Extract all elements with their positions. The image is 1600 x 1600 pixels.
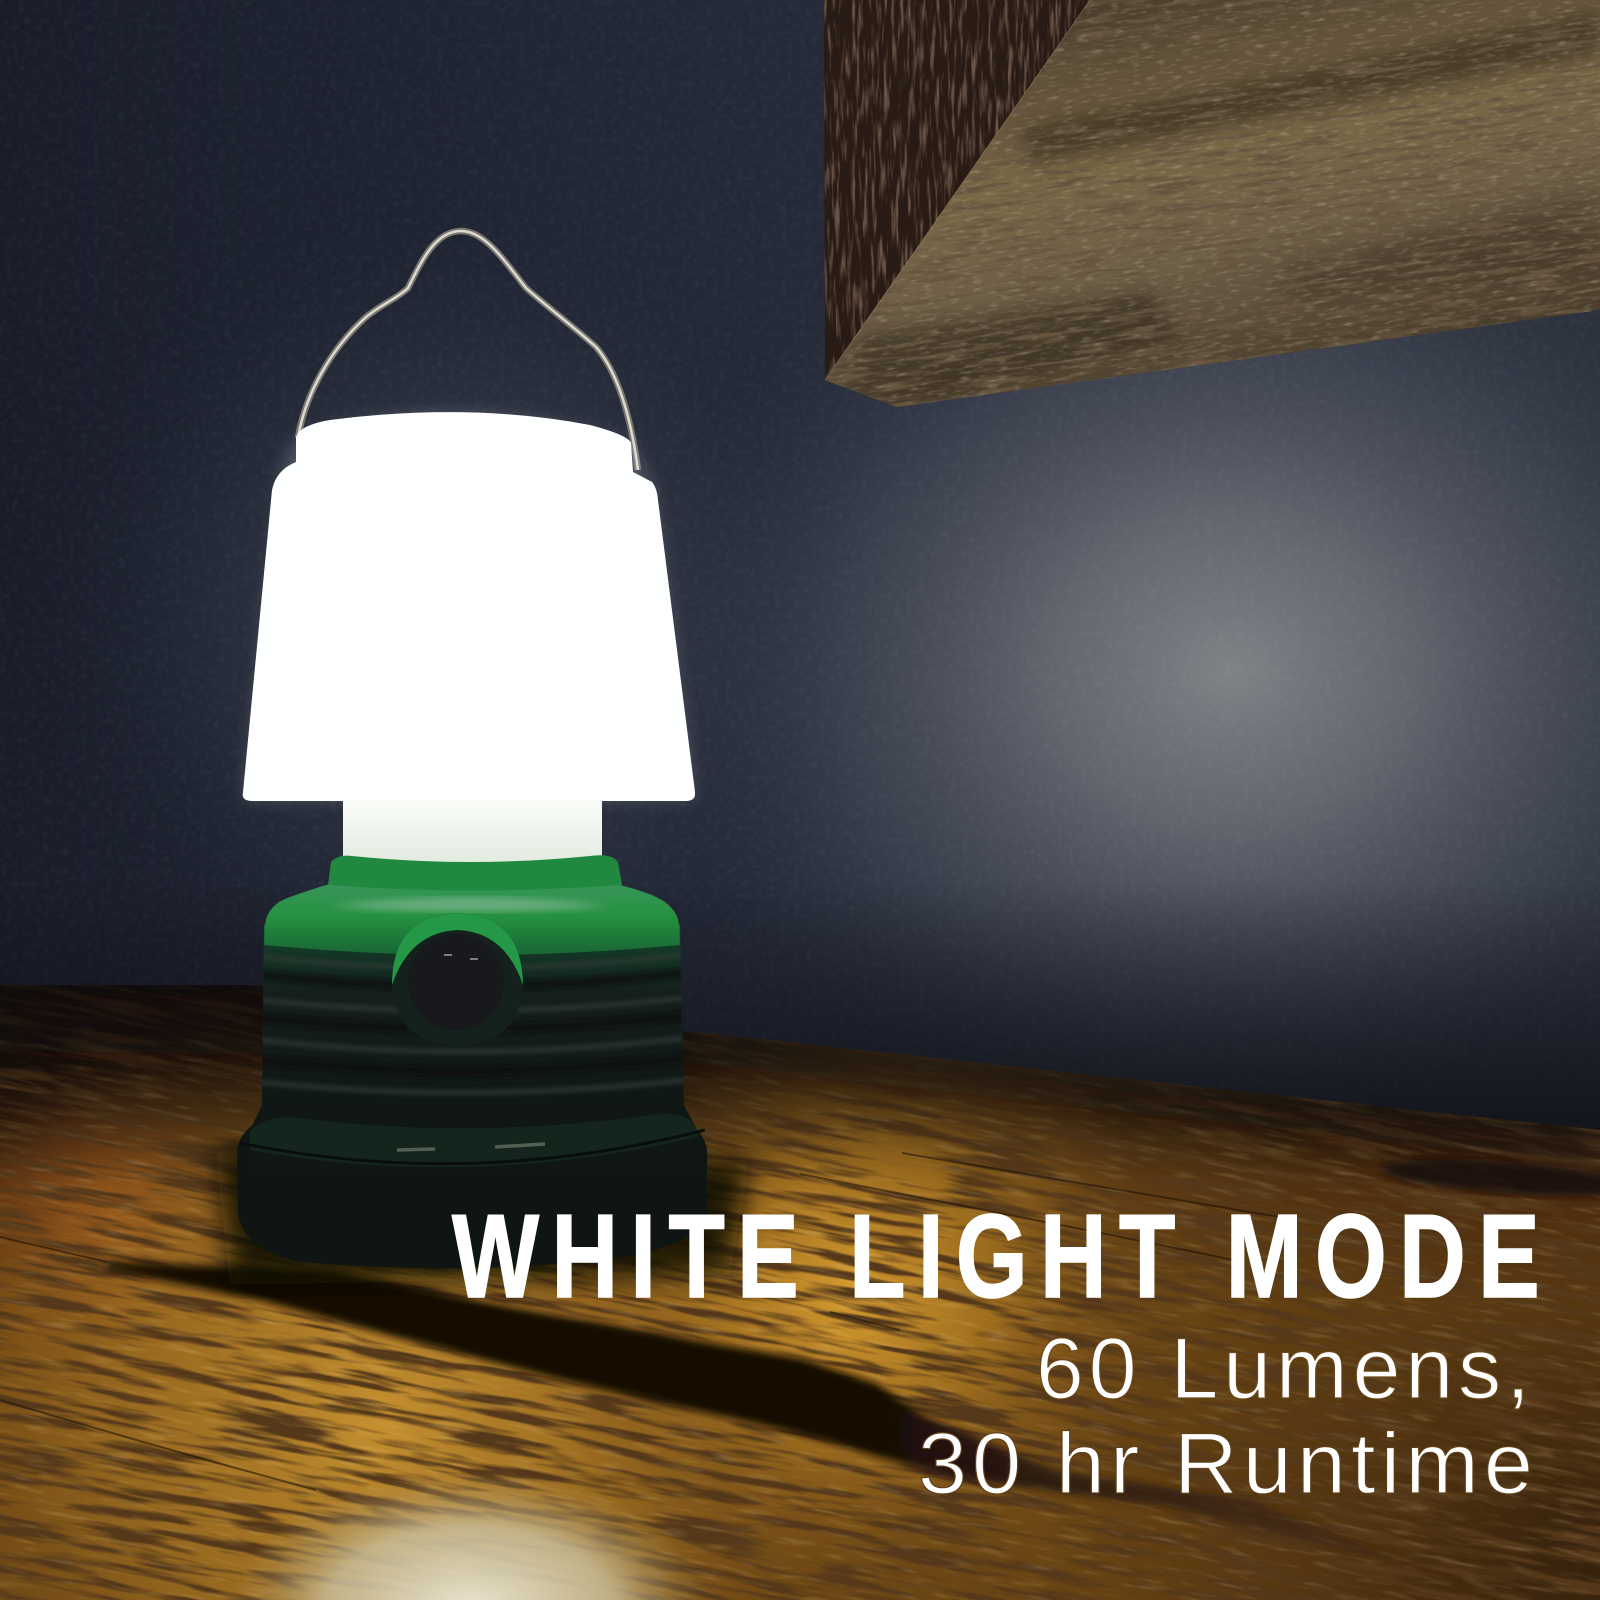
mitre seam (825, 0, 1090, 380)
wooden table top (0, 980, 1600, 1600)
light glare (243, 1477, 698, 1600)
table back shading (0, 985, 1600, 1164)
dark knot (1378, 1156, 1600, 1200)
lumens line: 60 Lumens, (1036, 1321, 1535, 1417)
base shoulder (264, 884, 680, 955)
glowing lamp shade (243, 412, 695, 801)
base top collar (328, 855, 622, 890)
beam end face (820, 0, 1100, 390)
wooden shelf beam (820, 0, 1600, 410)
spec text: lumens and runtime (918, 1321, 1538, 1512)
runtime line: 30 hr Runtime (918, 1416, 1538, 1512)
wall background (0, 0, 1600, 1140)
glow halo (243, 412, 695, 800)
beam front face (820, 0, 1600, 410)
lantern (237, 231, 707, 1268)
wood grain (0, 980, 1600, 1600)
wire handle (298, 231, 638, 470)
lantern shadow on table (102, 1257, 1400, 1560)
shoulder highlight (330, 897, 610, 912)
base ridged body (240, 925, 705, 1175)
table edge shading (0, 985, 1600, 1165)
foot ring (237, 1120, 707, 1268)
glowing inner tube (343, 800, 602, 862)
contact shadow (215, 1150, 750, 1285)
table cracks (0, 1153, 1285, 1490)
power button (392, 913, 523, 1046)
lower collar ring (250, 1114, 697, 1167)
